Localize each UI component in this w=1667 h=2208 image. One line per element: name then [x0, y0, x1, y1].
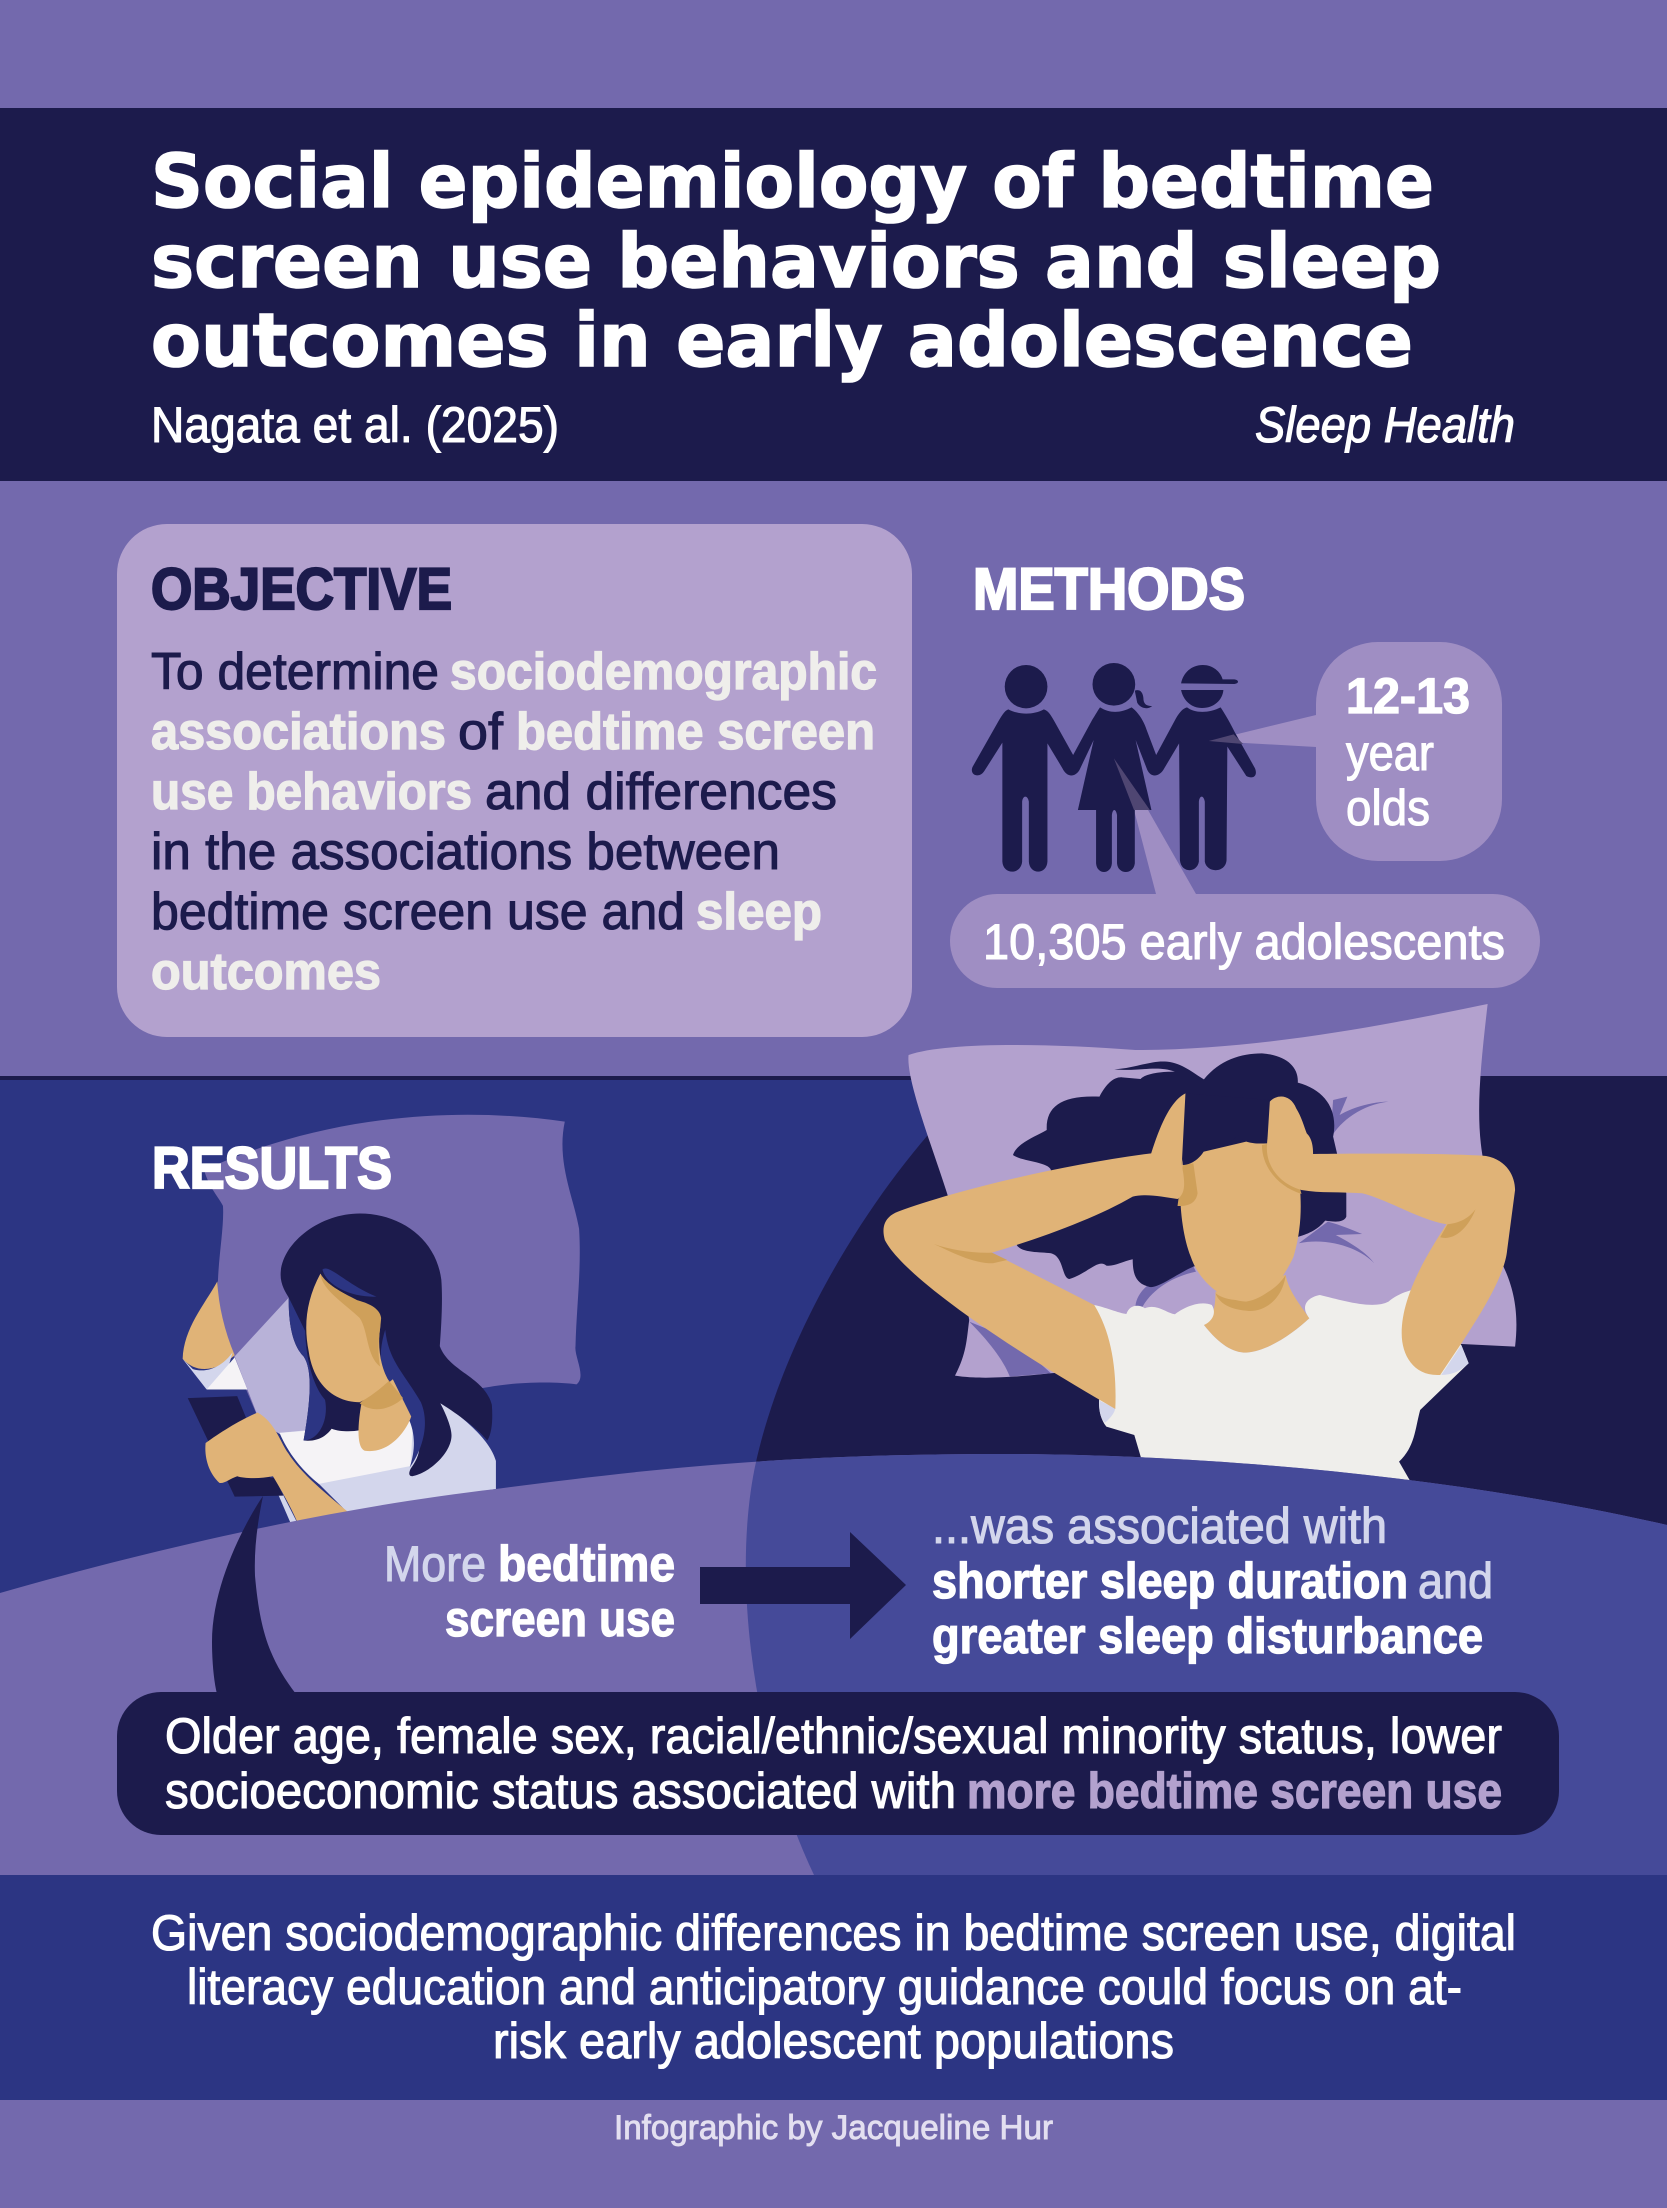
illustration: woman awake holding head — [883, 1004, 1516, 1480]
citation authors: Nagata et al. (2025) — [151, 397, 559, 453]
back arm and sleeve — [183, 1281, 247, 1389]
face — [306, 1274, 389, 1402]
title banner — [0, 108, 1667, 481]
callout: sample size: 10,305 early adolescents — [983, 914, 1505, 970]
panel: conclusion: Given sociodemographic differences in bedtime screen use, digital — [151, 1905, 1516, 1961]
hand and forearm — [205, 1412, 348, 1521]
objective text: and differences — [485, 763, 837, 821]
exposure label — [384, 1536, 675, 1647]
objective text: sociodemographic — [450, 643, 877, 701]
panel: sociodemographic summary — [117, 1692, 1559, 1835]
right arm — [1262, 1097, 1515, 1375]
shirt — [1094, 1290, 1469, 1480]
hair highlights — [289, 1269, 425, 1468]
face — [1180, 1137, 1301, 1302]
objective text: sleep — [696, 883, 822, 941]
title: Social epidemiology of bedtime — [151, 139, 1434, 225]
outcome label — [932, 1498, 1493, 1664]
callout: age: olds — [1346, 780, 1430, 836]
left arm — [883, 1093, 1185, 1409]
title — [151, 139, 1441, 384]
objective text: bedtime screen use and — [151, 883, 685, 941]
exposure label: More — [384, 1536, 486, 1592]
callout: age — [1209, 642, 1502, 861]
callout: age: year — [1346, 725, 1434, 781]
objective text: outcomes — [151, 943, 381, 1001]
panel: conclusion: risk early adolescent populations — [493, 2013, 1174, 2069]
objective heading: OBJECTIVE — [151, 557, 452, 622]
icon: three adolescents holding hands — [972, 663, 1256, 872]
objective text: of — [458, 703, 504, 761]
objective text: use behaviors — [151, 763, 472, 821]
exposure label: screen use — [445, 1591, 675, 1647]
pillow folds — [969, 1097, 1388, 1377]
panel: sociodemographic summary: more bedtime screen use — [967, 1763, 1502, 1819]
pillow — [908, 1004, 1516, 1378]
methods heading: METHODS — [973, 557, 1245, 622]
outcome label: and — [1418, 1553, 1493, 1609]
results background — [0, 1076, 1667, 1875]
journal name: Sleep Health — [1255, 397, 1515, 453]
callout: age: 12-13 — [1346, 668, 1470, 724]
objective text: bedtime screen — [516, 703, 875, 761]
hair — [1013, 1053, 1346, 1287]
objective text: in the associations between — [151, 823, 780, 881]
objective text: associations — [151, 703, 446, 761]
arrow — [700, 1532, 906, 1639]
neck — [1204, 1275, 1309, 1353]
bangs — [1182, 1093, 1270, 1165]
bedding — [0, 1454, 1667, 1875]
outcome label: greater sleep disturbance — [932, 1608, 1483, 1664]
pointer from phone to summary box — [212, 1496, 296, 1694]
title: screen use behaviors and sleep — [151, 219, 1441, 305]
panel: objective — [117, 524, 912, 1037]
phone light beam — [235, 1298, 312, 1438]
overlap highlights — [1209, 734, 1243, 744]
title: outcomes in early adolescence — [151, 298, 1413, 384]
outcome label: ...was associated with — [932, 1498, 1387, 1554]
callout: sample size — [950, 758, 1540, 988]
objective text — [151, 643, 877, 1001]
illustration: girl with phone in bed — [183, 1115, 581, 1524]
pillow — [204, 1115, 581, 1423]
panel: sociodemographic summary: Older age, female sex, racial/ethnic/sexual minority status, lower — [165, 1708, 1502, 1764]
results heading: RESULTS — [152, 1136, 392, 1201]
hair — [281, 1213, 492, 1476]
neck — [359, 1379, 411, 1451]
phone — [188, 1396, 283, 1497]
objective text: To determine — [151, 643, 439, 701]
panel: conclusion — [0, 1875, 1667, 2100]
panel: conclusion: literacy education and anticipatory guidance could focus on at- — [187, 1959, 1462, 2015]
panel: sociodemographic summary: socioeconomic status associated with — [165, 1763, 956, 1819]
exposure label: bedtime — [498, 1536, 675, 1592]
outcome label: shorter sleep duration — [932, 1553, 1408, 1609]
shirt — [278, 1402, 496, 1524]
panel: methods — [950, 557, 1540, 988]
footer credit: Infographic by Jacqueline Hur — [614, 2109, 1053, 2147]
